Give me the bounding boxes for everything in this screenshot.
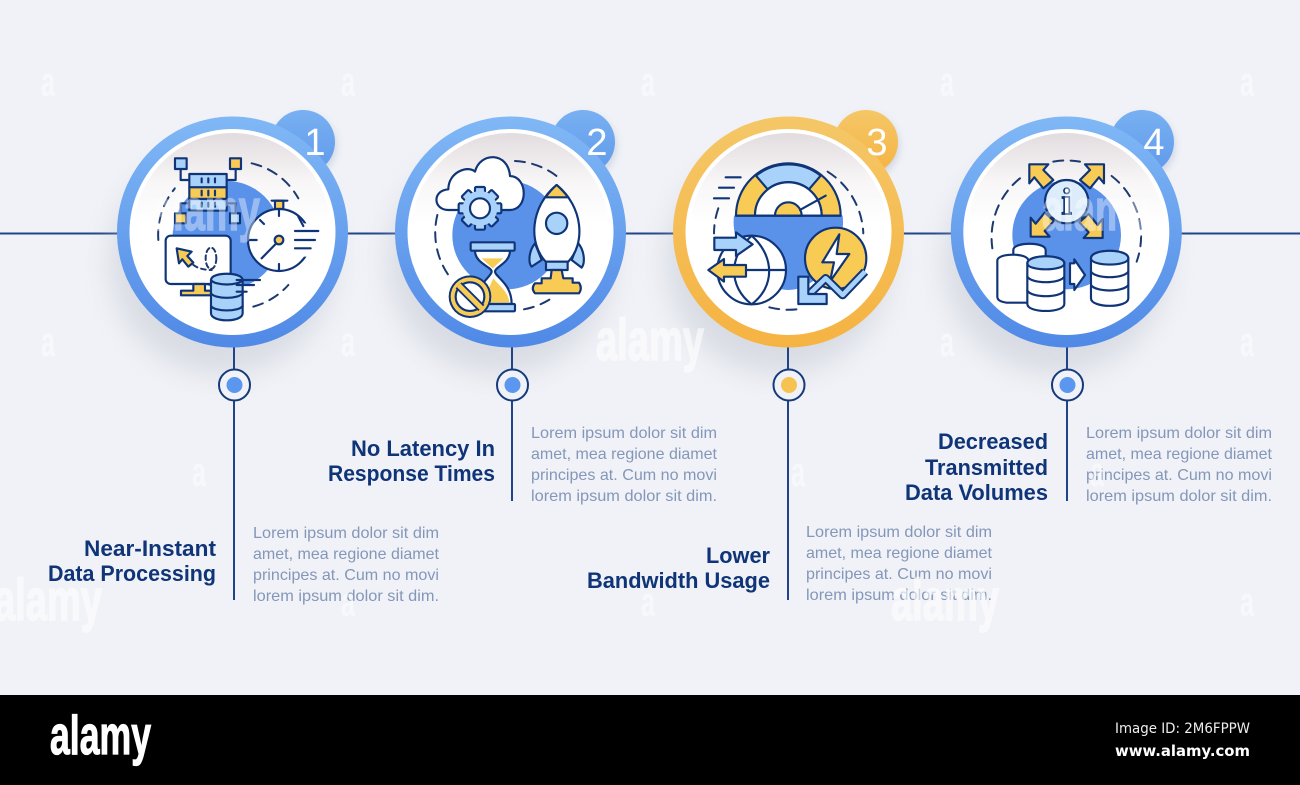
title 1: Data Processing — [48, 561, 216, 586]
watermarks: alamy — [1042, 178, 1150, 243]
title 2 — [328, 436, 495, 486]
description 3: lorem ipsum dolor sit dim. — [806, 587, 992, 604]
watermarks: a — [41, 58, 55, 105]
description 1: principes at. Cum no movi — [253, 567, 439, 584]
connector and node 4 — [944, 150, 1168, 501]
number 3: 3 — [866, 122, 888, 164]
watermarks: alamy — [891, 568, 999, 633]
timeline line — [0, 232, 1300, 234]
watermarks: a — [1240, 318, 1254, 365]
footer bar — [0, 695, 1300, 785]
title 3 — [587, 543, 770, 593]
description 3: amet, mea regione diamet — [806, 545, 993, 562]
step 1 — [48, 110, 440, 605]
ring 4 — [951, 116, 1182, 348]
watermarks: a — [940, 318, 954, 365]
watermarks: a — [1240, 58, 1254, 105]
watermarks: a — [341, 318, 355, 365]
icon: speed gauge, globe, lightning — [708, 163, 866, 310]
watermarks — [0, 58, 1254, 633]
number 1: 1 — [304, 122, 326, 164]
description 2: amet, mea regione diamet — [531, 446, 718, 463]
connector and node 2 — [388, 150, 612, 501]
icon: server, stopwatch, monitor, database — [158, 158, 323, 320]
website: www.alamy.com — [1115, 742, 1250, 760]
title 4: Decreased — [938, 429, 1048, 454]
ring 1 — [117, 116, 348, 348]
badge 3 — [834, 110, 899, 178]
watermarks: a — [940, 58, 954, 105]
connector and node 1 — [110, 150, 334, 600]
title 4 — [905, 429, 1048, 505]
watermarks: a — [341, 58, 355, 105]
watermarks: alamy — [596, 308, 704, 373]
title 3: Lower — [706, 543, 770, 568]
description 2: lorem ipsum dolor sit dim. — [531, 488, 717, 505]
description 2: principes at. Cum no movi — [531, 467, 717, 484]
number 4: 4 — [1143, 122, 1165, 164]
description 3: principes at. Cum no movi — [806, 566, 992, 583]
ring 3 — [673, 116, 904, 348]
step 4 — [905, 110, 1273, 505]
description 1: Lorem ipsum dolor sit dim — [253, 525, 439, 542]
description 1: amet, mea regione diamet — [253, 546, 440, 563]
number 2: 2 — [586, 122, 608, 164]
watermarks: a — [1090, 448, 1104, 495]
watermarks: a — [1240, 578, 1254, 625]
watermarks: a — [341, 578, 355, 625]
title 2: No Latency In — [351, 436, 495, 461]
description 3: Lorem ipsum dolor sit dim — [806, 524, 992, 541]
footer logo: alamy — [50, 704, 151, 766]
watermarks: a — [641, 58, 655, 105]
step 3 — [587, 110, 993, 604]
description 4 — [1086, 425, 1273, 505]
title 1 — [48, 536, 217, 586]
watermarks: a — [791, 448, 805, 495]
connector and node 3 — [666, 150, 890, 600]
title 3: Bandwidth Usage — [587, 568, 770, 593]
watermarks: alamy — [152, 178, 260, 243]
watermarks: a — [641, 578, 655, 625]
description 4: lorem ipsum dolor sit dim. — [1086, 488, 1272, 505]
title 1: Near-Instant — [84, 536, 217, 561]
image id: Image ID: 2M6FPPW — [1115, 721, 1250, 737]
title 2: Response Times — [328, 461, 495, 486]
icon: info with arrows and databases: i — [1062, 181, 1072, 222]
title 4: Transmitted — [925, 455, 1048, 480]
title 4: Data Volumes — [905, 480, 1048, 505]
description 2 — [531, 425, 718, 505]
watermarks: a — [192, 448, 206, 495]
description 1 — [253, 525, 440, 605]
step 2 — [328, 110, 718, 505]
badge 4 — [1110, 110, 1175, 178]
description 2: Lorem ipsum dolor sit dim — [531, 425, 717, 442]
badge 1 — [271, 110, 336, 178]
description 4: principes at. Cum no movi — [1086, 467, 1272, 484]
description 3 — [806, 524, 993, 604]
watermarks: a — [41, 318, 55, 365]
ring 2 — [395, 116, 626, 348]
description 4: Lorem ipsum dolor sit dim — [1086, 425, 1272, 442]
description 1: lorem ipsum dolor sit dim. — [253, 588, 439, 605]
icon: info with arrows and databases — [992, 160, 1141, 311]
badge 2 — [551, 110, 616, 178]
icon: cloud gear, hourglass, rocket — [435, 157, 584, 318]
description 4: amet, mea regione diamet — [1086, 446, 1273, 463]
